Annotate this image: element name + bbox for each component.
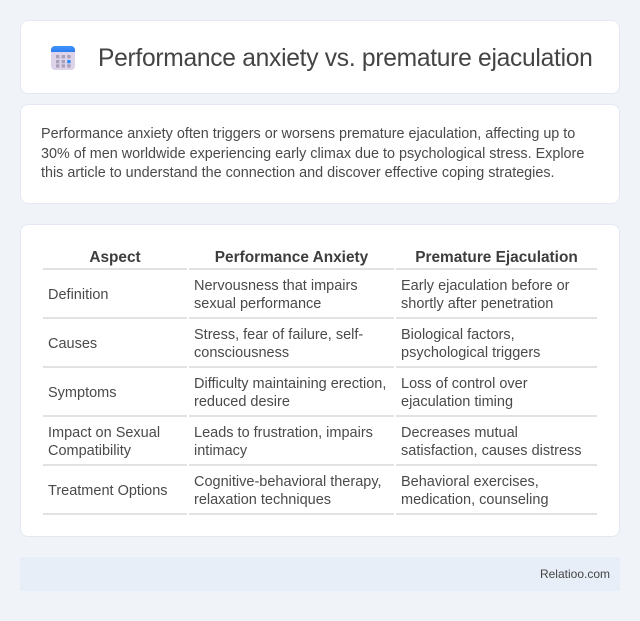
row label: impact on sexual compatibility: [48, 425, 160, 459]
intro card: [20, 104, 620, 204]
symptoms: performance anxiety: [194, 376, 386, 410]
table header: performance anxiety: Performance Anxiety: [215, 248, 368, 266]
symptoms: performance anxiety: Difficulty maintaining erection,: [194, 376, 386, 392]
impact: premature ejaculation: [401, 425, 582, 459]
intro text: [41, 126, 584, 181]
definition: performance anxiety: [194, 278, 358, 312]
row label: impact on sexual compatibility: Impact on Sexual: [48, 425, 160, 441]
impact: performance anxiety: [194, 425, 373, 459]
table header: premature ejaculation: Premature Ejaculation: [415, 248, 578, 266]
definition: performance anxiety: Nervousness that impairs: [194, 278, 358, 294]
row label: causes: Causes: [48, 336, 97, 352]
row label: definition: Definition: [48, 287, 108, 303]
causes: premature ejaculation: [401, 327, 540, 361]
causes: premature ejaculation: Biological factors,: [401, 327, 515, 343]
impact: performance anxiety: intimacy: [194, 443, 247, 459]
footer bar: [20, 557, 620, 591]
symptoms: premature ejaculation: [401, 376, 528, 410]
causes: performance anxiety: Stress, fear of failure, self-: [194, 327, 363, 343]
treatment: performance anxiety: Cognitive-behavioral therapy,: [194, 474, 382, 490]
definition: performance anxiety: sexual performance: [194, 296, 321, 312]
intro text: 30% of men worldwide experiencing early climax due to psychological stress. Explore: [41, 146, 584, 162]
intro text: this article to understand the connection and discover effective coping strategies.: [41, 165, 555, 181]
causes: premature ejaculation: psychological triggers: [401, 345, 540, 361]
impact: premature ejaculation: satisfaction, causes distress: [401, 443, 582, 459]
table header: aspect: Aspect: [89, 248, 141, 266]
treatment: premature ejaculation: Behavioral exercises,: [401, 474, 539, 490]
treatment: performance anxiety: [194, 474, 382, 508]
row label: treatment options: Treatment Options: [48, 483, 168, 499]
impact: premature ejaculation: Decreases mutual: [401, 425, 518, 441]
header card: [20, 20, 620, 94]
title: Performance anxiety vs. premature ejaculation: [98, 45, 593, 72]
impact: performance anxiety: Leads to frustration, impairs: [194, 425, 373, 441]
definition: premature ejaculation: shortly after penetration: [401, 296, 553, 312]
table card: [20, 224, 620, 537]
treatment: premature ejaculation: medication, counseling: [401, 492, 549, 508]
causes: performance anxiety: consciousness: [194, 345, 289, 361]
row label: symptoms: Symptoms: [48, 385, 116, 401]
definition: premature ejaculation: Early ejaculation before or: [401, 278, 569, 294]
treatment: premature ejaculation: [401, 474, 549, 508]
icon: calendar: [51, 46, 75, 70]
intro text: Performance anxiety often triggers or worsens premature ejaculation, affecting up to: [41, 126, 575, 142]
treatment: performance anxiety: relaxation techniques: [194, 492, 331, 508]
causes: performance anxiety: [194, 327, 363, 361]
row label: impact on sexual compatibility: Compatibility: [48, 443, 131, 459]
symptoms: premature ejaculation: ejaculation timing: [401, 394, 513, 410]
footer text: Relatioo.com: [540, 567, 610, 581]
definition: premature ejaculation: [401, 278, 570, 312]
symptoms: premature ejaculation: Loss of control over: [401, 376, 528, 392]
symptoms: performance anxiety: reduced desire: [194, 394, 290, 410]
